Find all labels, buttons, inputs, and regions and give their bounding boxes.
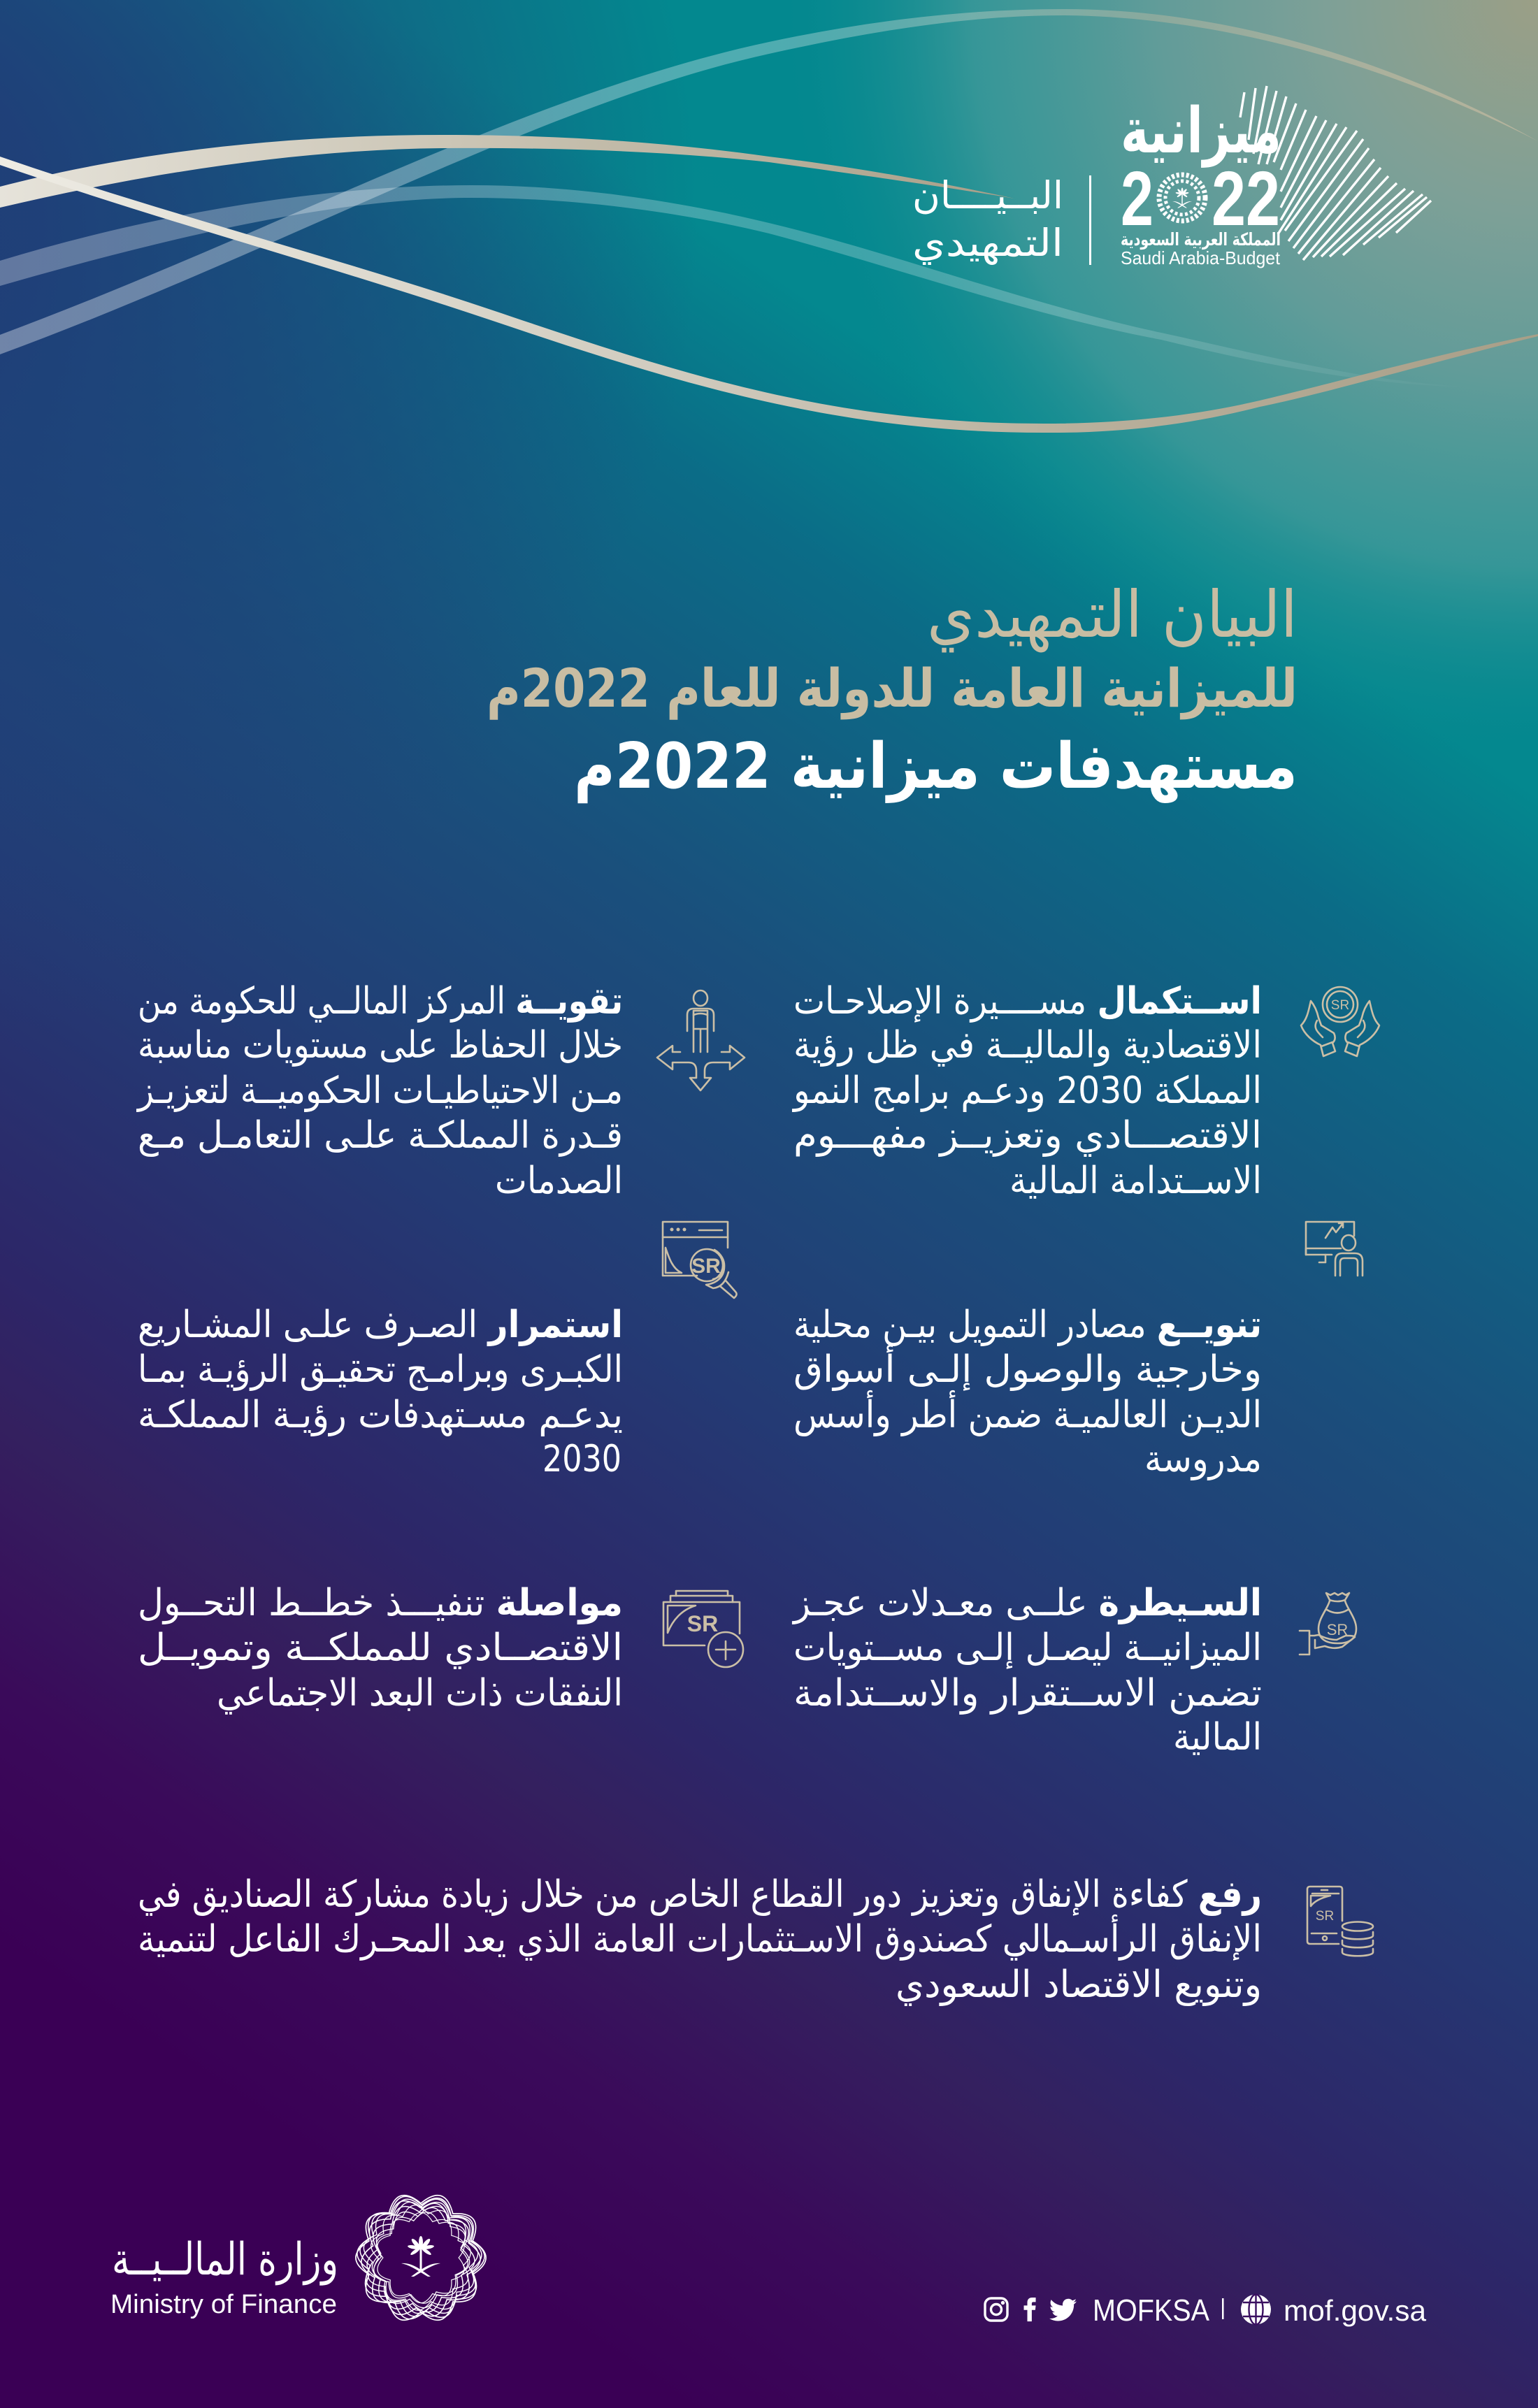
ministry english name: Ministry of Finance bbox=[110, 2290, 337, 2319]
text: deficit: المالية bbox=[1173, 1716, 1262, 1759]
top right caption: البــيــــان bbox=[912, 173, 1063, 217]
footer contacts bbox=[985, 2293, 1427, 2328]
decorative ribbons bbox=[0, 9, 1538, 433]
icon: facebook bbox=[1024, 2298, 1036, 2321]
icon: twitter bbox=[1049, 2299, 1077, 2321]
text: diversify funding: وخارجية والوصول إلـى أسواق bbox=[793, 1345, 1262, 1391]
ministry arabic name: وزارة المالــيــة bbox=[112, 2234, 338, 2286]
text: spending: الكبـرى وبرامـج تحقيـق الرؤيـة بمـا bbox=[138, 1348, 623, 1391]
text: spending bbox=[138, 1304, 623, 1480]
map of Saudi Arabia stripes bbox=[1240, 86, 1431, 260]
heading block: للميزانية العامة للدولة للعام 2022م bbox=[487, 657, 1298, 720]
heading block: البيان التمهيدي bbox=[927, 577, 1298, 653]
text: financial position: قـدرة المملكـة علـى التعامـل مـع bbox=[138, 1114, 623, 1157]
logo word: budget: ميزانية bbox=[1121, 94, 1281, 168]
logo year: 22 bbox=[1212, 156, 1280, 242]
logo kingdom line: المملكة العربية السعودية bbox=[1121, 229, 1281, 250]
logo year bbox=[1121, 156, 1280, 242]
text: spending: يدعـم مسـتهدفات رؤيـة المملكـة bbox=[138, 1394, 623, 1436]
text: transformation plans: الاقتصــادي للمملكــة وتمويــل bbox=[138, 1627, 623, 1669]
icon: window with magnifier: SR bbox=[691, 1255, 721, 1278]
text: deficit: السـيطرة علــى معـدلات عجـز bbox=[791, 1582, 1262, 1624]
icon: banknotes with plus bbox=[663, 1591, 743, 1667]
text: transformation plans: مواصلة تنفيـــذ خطــط التحــول bbox=[138, 1582, 623, 1624]
text: spending: استمرار الصـرف علـى المشـاريع bbox=[138, 1304, 623, 1346]
logo star emblem bbox=[1159, 175, 1205, 221]
website: mof.gov.sa bbox=[1284, 2294, 1427, 2327]
text: reforms: الاســتدامة المالية bbox=[1009, 1160, 1262, 1202]
text: diversify funding bbox=[793, 1304, 1262, 1480]
heading block: مستهدفات ميزانية 2022م bbox=[574, 730, 1298, 803]
icon: money bag in hand: SR bbox=[1327, 1621, 1348, 1638]
text: transformation plans bbox=[138, 1582, 623, 1715]
icon: person at crossroads bbox=[657, 990, 745, 1090]
icon: money bag in hand bbox=[1300, 1593, 1356, 1654]
text: diversify funding: الديـن العالميـة ضمن أطر وأسس bbox=[793, 1390, 1262, 1436]
text: reforms: الاقتصـــادي وتعزيــز مفهـــوم bbox=[793, 1114, 1262, 1157]
logo english line: Saudi Arabia-Budget bbox=[1121, 247, 1281, 268]
text: financial position: تقويــة المركز المالــي للحكومة من bbox=[138, 980, 623, 1023]
icon: phone and coins: SR bbox=[1316, 1909, 1334, 1924]
top right caption: التمهيدي bbox=[912, 221, 1063, 265]
text: reforms: المملكة 2030 ودعـم برامج النمو bbox=[791, 1069, 1262, 1112]
logo palm and swords bbox=[401, 2236, 440, 2277]
logo: budget 2022 bbox=[1121, 86, 1431, 268]
text: spending efficiency: رفع كفاءة الإنفاق وتعزيز دور القطاع الخاص من خلال زيادة مشاركة الصناديق في bbox=[138, 1873, 1262, 1916]
logo rosette bbox=[354, 2194, 488, 2321]
logo year: 2 bbox=[1121, 156, 1154, 242]
text: spending efficiency bbox=[138, 1873, 1262, 2006]
text: deficit: تضمن الاســتقرار والاســتدامة bbox=[793, 1672, 1262, 1715]
text: spending efficiency: الإنفاق الرأسـمالي كصندوق الاسـتثمارات العامة الذي يعد المحـرك الفاعل لتنمية bbox=[138, 1915, 1262, 1961]
text: diversify funding: مدروسة bbox=[1144, 1438, 1262, 1480]
icon: hands holding coin: SR bbox=[1331, 998, 1349, 1013]
text: spending efficiency: وتنويع الاقتصاد السعودي bbox=[896, 1963, 1262, 2006]
ministry of finance logo bbox=[110, 2194, 488, 2321]
text: deficit bbox=[791, 1582, 1262, 1759]
text: diversify funding: تنويــع مصادر التمويل بيـن محلية bbox=[793, 1304, 1262, 1346]
icon: phone and coins bbox=[1307, 1887, 1373, 1956]
icon: instagram bbox=[985, 2298, 1007, 2321]
text: reforms bbox=[791, 980, 1262, 1202]
icon: monitor with chart bbox=[1306, 1222, 1363, 1276]
handle: MOFKSA bbox=[1093, 2293, 1210, 2328]
logo divider bbox=[1089, 175, 1091, 265]
top right caption bbox=[912, 173, 1063, 265]
text: reforms: الاقتصادية والماليــة في ظل رؤية bbox=[793, 1024, 1262, 1067]
text: reforms: اســتكمال مســــيرة الإصلاحـات bbox=[793, 980, 1262, 1023]
text: spending: 2030 bbox=[542, 1438, 621, 1480]
text: financial position bbox=[136, 980, 623, 1202]
text: financial position: خلال الحفاظ على مستويات مناسبة bbox=[138, 1024, 623, 1067]
text: financial position: الصدمات bbox=[495, 1160, 623, 1202]
icon: hands holding coin bbox=[1301, 987, 1379, 1056]
icon: window with magnifier bbox=[663, 1222, 737, 1298]
icon: banknotes with plus: SR bbox=[687, 1611, 718, 1636]
icon: globe bbox=[1241, 2294, 1271, 2325]
text: transformation plans: النفقات ذات البعد الاجتماعي bbox=[217, 1672, 623, 1715]
text: financial position: مـن الاحتياطيـات الحكوميــة لتعزيـز bbox=[136, 1069, 623, 1112]
heading block bbox=[487, 577, 1298, 803]
text: deficit: الميزانيــة ليصـل إلـى مســتويات bbox=[793, 1627, 1262, 1669]
